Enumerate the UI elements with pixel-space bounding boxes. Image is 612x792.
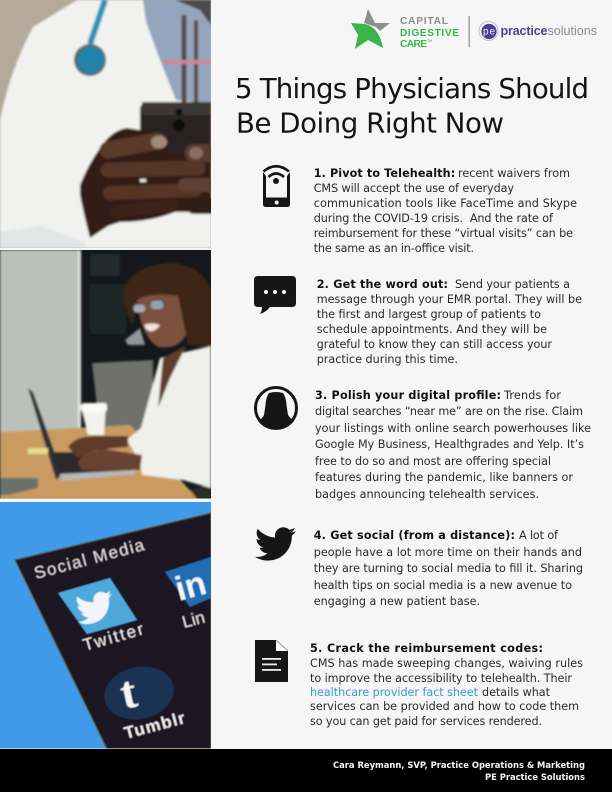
text: 4. Get social: they are turning to social media to fill it. Sharing [314, 562, 583, 575]
text: 3. Polish your digital profile: 3. Polish your digital profile: [315, 389, 501, 402]
photo: social media app screen: Lin [180, 608, 207, 632]
text: 3. Polish your digital profile: digital searches “near me” are on the rise. Claim [315, 405, 583, 418]
photo: social media app screen: Tumblr [122, 708, 187, 743]
text: 3. Polish your digital profile: Google My Business, Healthgrades and Yelp. It’s [315, 438, 584, 451]
text: 1. Pivot to Telehealth: reimbursement for these “virtual visits” can be [314, 227, 573, 240]
logo: Capital Digestive Care: CAPITAL [400, 16, 448, 27]
text: 2. Get the word out: Send your patients a [455, 278, 570, 291]
text: 2. Get the word out: schedule appointments. And they will be [317, 323, 547, 336]
text: 4. Get social: engaging a new patient base. [314, 595, 480, 608]
text: 5. Crack the reimbursement codes: services can be provided and how to code them [310, 700, 579, 713]
title: 5 Things Physicians Should [235, 72, 589, 105]
text: 5. Crack the reimbursement codes: to improve the accessibility to telehealth. Their [310, 672, 572, 685]
logo: Capital Digestive Care: DIGESTIVE [400, 28, 459, 39]
text: 2. Get the word out: message through your EMR portal. They will be [317, 293, 582, 306]
footer bar: Cara Reymann, SVP, Practice Operations & Marketing [333, 760, 585, 770]
text: 1. Pivot to Telehealth: recent waivers from [458, 167, 570, 180]
text: 5. Crack the reimbursement codes: healthcare provider fact sheet [310, 686, 479, 699]
text: 4. Get social [314, 529, 583, 608]
text: 3. Polish your digital profile: badges announcing telehealth services. [315, 488, 539, 501]
text: 4. Get social: health tips on social media is a new avenue to [314, 579, 572, 592]
photo: social media app screen [0, 502, 211, 749]
text: 1. Pivot to Telehealth: the same as an in-office visit. [314, 242, 474, 255]
title: Be Doing Right Now [236, 107, 504, 140]
logo: PE Practice Solutions: solutions [548, 24, 597, 38]
text: 3. Polish your digital profile: free to do so and most are offering special [315, 455, 551, 468]
logo: Capital Digestive Care [351, 9, 459, 50]
tumblr circle [104, 666, 174, 720]
text: 2. Get the word out [317, 278, 582, 366]
text: 3. Polish your digital profile: your listings with online search powerhouses like [315, 422, 591, 435]
photo: social media app screen: in [171, 564, 210, 609]
photo: woman working on laptop [0, 250, 211, 499]
text: 1. Pivot to Telehealth: 1. Pivot to Telehealth: [314, 167, 455, 180]
logo: PE Practice Solutions [479, 22, 597, 40]
text: 2. Get the word out: grateful to know they can still access your [317, 338, 552, 351]
logo: Capital Digestive Care: TM [427, 39, 432, 43]
text: 1. Pivot to Telehealth [314, 167, 577, 255]
text: 3. Polish your digital profile [315, 389, 591, 501]
logo: PE Practice Solutions: pe [483, 26, 495, 38]
photo: social media app screen: Twitter [81, 619, 146, 655]
text: 4. Get social: people have a lot more time on their hands and [314, 546, 582, 559]
twitter tile [58, 578, 137, 634]
logo divider [468, 16, 470, 47]
footer bar: PE Practice Solutions [485, 772, 585, 782]
text: 2. Get the word out: practice during this time. [317, 353, 458, 366]
text: 1. Pivot to Telehealth: CMS will accept the use of everyday [314, 182, 514, 195]
photo: social media app screen: Social Media [32, 535, 147, 583]
photo: social media app screen: t [115, 666, 142, 719]
text: 1. Pivot to Telehealth: communication tools like FaceTime and Skype [314, 197, 577, 210]
linkedin tile [165, 557, 211, 607]
text: 5. Crack the reimbursement codes [310, 642, 583, 728]
text: 3. Polish your digital profile: Trends for [503, 389, 561, 402]
icon: twitter bird [255, 527, 296, 561]
text: 5. Crack the reimbursement codes: details what [482, 686, 551, 699]
text: 2. Get the word out: the first and largest group of patients to [317, 308, 541, 321]
icon: person profile [256, 388, 296, 429]
photo: physician holding smartphone [0, 0, 217, 248]
footer bar [0, 749, 612, 792]
text: 5. Crack the reimbursement codes: 5. Crack the reimbursement codes: [310, 642, 543, 655]
logo: Capital Digestive Care: CARE [400, 39, 427, 50]
title [235, 72, 589, 140]
text: 5. Crack the reimbursement codes: CMS has made sweeping changes, waiving rules [310, 657, 583, 670]
text: 2. Get the word out: 2. Get the word out: [317, 278, 448, 291]
icon: smartphone with wifi signal [263, 166, 290, 207]
text: 5. Crack the reimbursement codes: so you can get paid for services rendered. [310, 715, 542, 728]
text: 1. Pivot to Telehealth: during the COVID-19 crisis. And the rate of [314, 212, 554, 225]
logo: PE Practice Solutions: practice [500, 24, 548, 38]
text: 4. Get social: 4. Get social (from a distance): [314, 529, 515, 542]
text: 4. Get social: A lot of [519, 529, 559, 542]
text: 3. Polish your digital profile: features during the pandemic, like banners or [315, 471, 573, 484]
icon: chat bubble [254, 276, 296, 314]
icon: document [255, 640, 288, 682]
